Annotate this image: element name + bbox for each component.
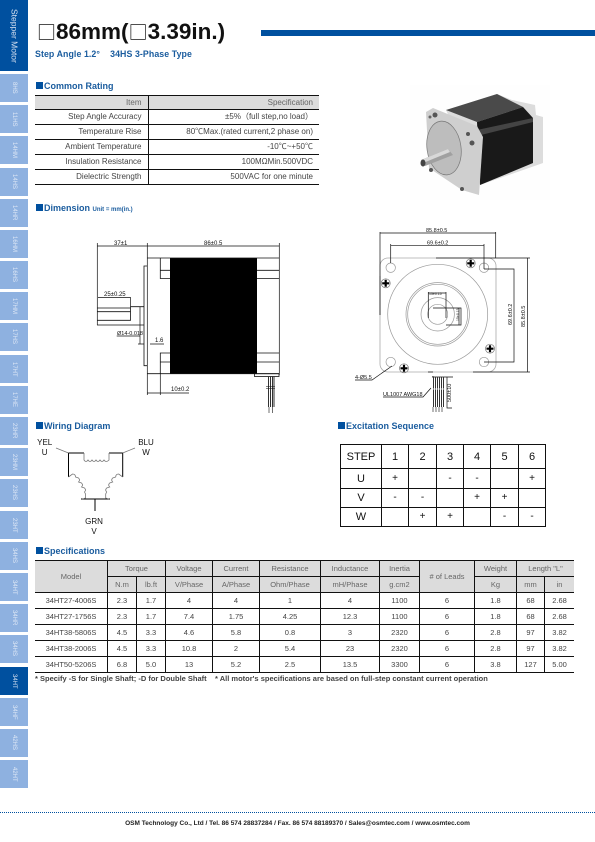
table: motor specifications: 34HT27-4006S	[46, 596, 96, 605]
table: motor specifications: 0.8	[285, 628, 295, 637]
sidebar navigation: 42HS	[11, 735, 17, 750]
drawing: side view	[96, 240, 280, 413]
table: motor specifications: in	[557, 580, 562, 589]
table: excitation sequence: V	[357, 492, 365, 504]
footer contact line: OSM Technology Co., Ltd / Tel. 86 574 28837284 / Fax. 86 574 88189370 / Sales@osmtec.com / www.osmtec.com	[125, 820, 470, 827]
table: motor specifications: 23	[346, 644, 354, 653]
table: motor specifications: Kg	[491, 580, 500, 589]
table: motor specifications	[35, 560, 574, 673]
table: excitation sequence: +	[474, 492, 480, 503]
table: motor specifications: 2.8	[490, 644, 501, 653]
heading: Specifications: Specifications	[44, 546, 105, 556]
terminal labels	[37, 438, 154, 536]
table: motor specifications: 10.8	[182, 644, 196, 653]
table: motor specifications: 6	[445, 612, 449, 621]
table: common rating: Ambient Temperature	[65, 142, 142, 151]
connections	[68, 453, 123, 511]
active section tab: Stepper Motor	[0, 0, 28, 71]
table: motor specifications: 1100	[391, 596, 408, 605]
sidebar navigation: 11HS	[11, 112, 17, 126]
table: motor specifications: 3.3	[146, 628, 156, 637]
table: motor specifications: 68	[526, 612, 535, 621]
table: motor specifications: 3	[348, 628, 352, 637]
terminal labels: U	[42, 448, 48, 457]
diagram: 3-phase wiring	[37, 438, 154, 536]
table: motor specifications: A/Phase	[222, 580, 250, 589]
table: motor specifications: 4	[234, 596, 238, 605]
table: excitation sequence: -	[448, 472, 452, 484]
terminal labels: V	[91, 527, 97, 536]
subtitle: Step Angle 1.2° 34HS 3-Phase Type	[35, 49, 192, 59]
table: motor specifications: 1	[288, 596, 292, 605]
table: motor specifications: 97	[526, 628, 535, 637]
active section tab: Stepper Motor: Stepper Motor	[9, 9, 19, 62]
sidebar navigation: 42HT	[11, 767, 17, 781]
dimension lines	[97, 243, 279, 395]
table: excitation sequence: +	[420, 511, 425, 522]
motor body	[97, 258, 279, 376]
drawing: front view	[355, 228, 530, 412]
table: motor specifications: 3.3	[146, 644, 156, 653]
lead wires	[432, 377, 445, 412]
sidebar navigation: 34HT	[11, 580, 17, 594]
table: motor specifications: 4	[348, 596, 352, 605]
table: excitation sequence: +	[502, 492, 507, 503]
terminal labels: BLU	[138, 438, 154, 447]
dimension labels: 15±0.15	[456, 308, 460, 321]
table: motor specifications: 97	[526, 644, 535, 653]
coils	[56, 448, 135, 499]
sidebar navigation: 17HE	[11, 392, 17, 408]
table: motor specifications: V/Phase	[175, 580, 203, 589]
terminal labels: W	[142, 448, 150, 457]
table: common rating: Step Angle Accuracy	[68, 112, 142, 121]
sidebar navigation: 16HM	[11, 236, 17, 252]
sidebar navigation: 23HS	[11, 485, 17, 500]
dimension labels: 1.6	[155, 338, 164, 344]
title: □86mm(□3.39in.)	[37, 18, 225, 45]
table: motor specifications: Voltage	[176, 564, 202, 573]
sidebar navigation: 23HM	[11, 454, 17, 470]
table: motor specifications: 5.4	[285, 644, 295, 653]
table: motor specifications: 2.5	[285, 660, 295, 669]
current tab: 34HT: 34HT	[11, 674, 17, 688]
table: motor specifications: 2320	[391, 628, 408, 637]
table: common rating	[35, 95, 319, 185]
heading: Wiring Diagram: Wiring Diagram	[44, 421, 110, 431]
table: excitation sequence: +	[447, 511, 453, 522]
table: motor specifications: g.cm2	[389, 580, 410, 589]
table: common rating: 500VAC for one minute	[230, 172, 313, 181]
table: motor specifications: lb.ft	[145, 580, 157, 589]
table: motor specifications: 5.8	[231, 628, 241, 637]
sidebar navigation: 17HS	[11, 329, 17, 344]
table: excitation sequence: STEP	[347, 450, 375, 462]
table: excitation sequence: -	[530, 511, 534, 522]
table: excitation sequence: W	[356, 511, 366, 523]
table: excitation sequence: -	[421, 492, 424, 503]
dimension labels: 15±0.15	[429, 292, 442, 296]
sidebar navigation: 34HF	[11, 705, 17, 719]
table: motor specifications: 34HT38-5806S	[46, 628, 96, 637]
dimension labels: 69.6±0.2	[427, 240, 448, 246]
sidebar navigation	[0, 0, 28, 788]
dimension labels: 4-Ø5.5	[355, 375, 372, 381]
table: motor specifications: 2320	[391, 644, 408, 653]
table: excitation sequence: -	[503, 511, 506, 522]
table: common rating: Item	[126, 98, 142, 107]
dimension labels: 25±0.25	[104, 292, 126, 298]
table: motor specifications: 1.7	[146, 596, 156, 605]
sidebar navigation: 14HM	[11, 142, 17, 158]
table: motor specifications: Weight	[484, 564, 507, 573]
table: motor specifications: 2	[234, 644, 238, 653]
table: motor specifications: 5.2	[231, 660, 241, 669]
table: motor specifications: 1100	[391, 612, 408, 621]
table: motor specifications: 2.3	[117, 596, 127, 605]
table: motor specifications: 6	[445, 644, 449, 653]
dimension labels: 86±0.5	[204, 241, 223, 247]
sidebar navigation: 8HS	[11, 82, 17, 94]
table: motor specifications: 5.0	[146, 660, 156, 669]
photo: stepper motor	[420, 94, 543, 195]
terminal labels: YEL	[37, 438, 53, 447]
table: motor specifications: 2.68	[552, 612, 567, 621]
table: excitation sequence: 2	[419, 450, 426, 462]
table: common rating: Insulation Resistance	[65, 157, 142, 166]
heading: Dimension: Dimension Unit = mm(in.)	[44, 203, 133, 213]
ground screws	[381, 259, 494, 373]
sidebar navigation: 17HT	[11, 362, 17, 376]
table: motor specifications: 4.5	[117, 628, 127, 637]
table: excitation sequence: U	[357, 472, 365, 484]
table: motor specifications: 4.6	[184, 628, 194, 637]
table: motor specifications: # of Leads	[429, 572, 465, 581]
footer rule	[0, 812, 595, 813]
sidebar navigation: 34HS	[11, 548, 17, 564]
table: motor specifications: 5.00	[552, 660, 567, 669]
current tab: 34HT	[0, 667, 28, 695]
table: motor specifications: 1.8	[490, 596, 501, 605]
table: motor specifications: 2.3	[117, 612, 127, 621]
table: motor specifications: Torque	[125, 564, 148, 573]
title bar	[261, 30, 595, 36]
table: motor specifications: 6.8	[117, 660, 127, 669]
table: motor specifications: Inertia	[389, 564, 410, 573]
specification footnote: * Specify -S for Single Shaft; -D for Double Shaft * All motor's specifications are based on full-step constant current operation	[35, 674, 488, 683]
table: motor specifications: 2.8	[490, 628, 501, 637]
dimension labels: 85.8±0.5	[426, 228, 447, 234]
dimension labels: 500±10	[447, 384, 453, 402]
table: excitation sequence: 6	[529, 450, 535, 462]
table: motor specifications: 34HT27-1756S	[46, 612, 96, 621]
table: motor specifications: Model	[61, 572, 81, 581]
table: motor specifications: 127	[524, 660, 537, 669]
flange outline	[380, 258, 530, 372]
sidebar navigation: 17HM	[11, 298, 17, 314]
dimension labels: Ø14-0.018	[117, 331, 143, 337]
dimension lines	[355, 232, 528, 408]
table: motor specifications: 4.25	[283, 612, 297, 621]
table: common rating: ±5%（full step,no load）	[225, 112, 313, 121]
table: motor specifications: N.m	[115, 580, 129, 589]
dimension labels: UL1007 AWG18	[383, 392, 423, 398]
table: motor specifications: mm	[524, 580, 537, 589]
sidebar navigation: 14HS	[11, 174, 17, 190]
table: motor specifications: 2.68	[552, 596, 567, 605]
heading: Common Rating: Common Rating	[44, 81, 114, 91]
sidebar navigation: 23HT	[11, 518, 17, 532]
lead wires	[266, 376, 275, 413]
dimension labels	[355, 228, 527, 402]
table: motor specifications: 4.5	[117, 644, 127, 653]
dimension labels	[104, 241, 223, 393]
table: motor specifications: 6	[445, 596, 449, 605]
table: motor specifications: 6	[445, 628, 449, 637]
table: motor specifications: 1.8	[490, 612, 501, 621]
terminal labels: GRN	[85, 517, 103, 526]
table: motor specifications: Ohm/Phase	[270, 580, 310, 589]
table: common rating: Specification	[268, 98, 313, 107]
table: motor specifications: 12.3	[343, 612, 357, 621]
table: motor specifications: Length "L"	[528, 564, 563, 573]
table: motor specifications: 68	[526, 596, 535, 605]
table: excitation sequence: 1	[392, 450, 398, 462]
dimension labels: 69.6±0.2	[508, 304, 514, 325]
table: motor specifications: mH/Phase	[332, 580, 368, 589]
dimension labels: 37±1	[114, 241, 128, 247]
table: motor specifications: Current	[223, 564, 248, 573]
table: common rating: 80℃Max.(rated current,2 phase on)	[186, 127, 313, 136]
dimension labels: 10±0.2	[171, 387, 190, 393]
table: excitation sequence: 3	[447, 450, 453, 462]
table: excitation sequence: 5	[501, 450, 508, 462]
table: motor specifications: Inductance	[332, 564, 368, 573]
table: motor specifications: 7.4	[184, 612, 194, 621]
sidebar navigation: 23HR	[11, 423, 17, 439]
table: motor specifications: 1.75	[229, 612, 243, 621]
table: common rating: Temperature Rise	[78, 127, 142, 136]
table: motor specifications: 13	[185, 660, 193, 669]
table: excitation sequence: +	[392, 472, 398, 484]
sidebar navigation: 16HS	[11, 267, 17, 282]
table: common rating: Dielectric Strength	[76, 172, 142, 181]
sidebar navigation: 34HS	[11, 641, 17, 656]
table: motor specifications: 3.82	[552, 628, 567, 637]
table: common rating: -10℃~+50℃	[267, 142, 313, 151]
table: motor specifications: 34HT50-5206S	[46, 660, 96, 669]
table: motor specifications: 3300	[391, 660, 408, 669]
table: excitation sequence: +	[529, 472, 535, 484]
sidebar navigation: 34HR	[11, 610, 17, 626]
table: common rating: 100MΩMin.500VDC	[242, 157, 313, 166]
table: excitation sequence	[340, 444, 546, 527]
table: motor specifications: 13.5	[343, 660, 357, 669]
table: motor specifications: 6	[445, 660, 449, 669]
heading: Excitation Sequence: Excitation Sequence	[346, 421, 434, 431]
table: motor specifications: 4	[187, 596, 191, 605]
table: motor specifications: 3.8	[490, 660, 501, 669]
table: motor specifications: 3.82	[552, 644, 567, 653]
table: excitation sequence: -	[475, 472, 479, 484]
table: excitation sequence: 4	[474, 450, 480, 462]
table: motor specifications: 1.7	[146, 612, 156, 621]
sidebar navigation: 14HR	[11, 205, 17, 221]
table: excitation sequence: -	[393, 492, 397, 503]
dimension labels: 85.8±0.5	[521, 306, 527, 327]
table: motor specifications: Resistance	[271, 564, 309, 573]
table: motor specifications: 34HT38-2006S	[46, 644, 96, 653]
